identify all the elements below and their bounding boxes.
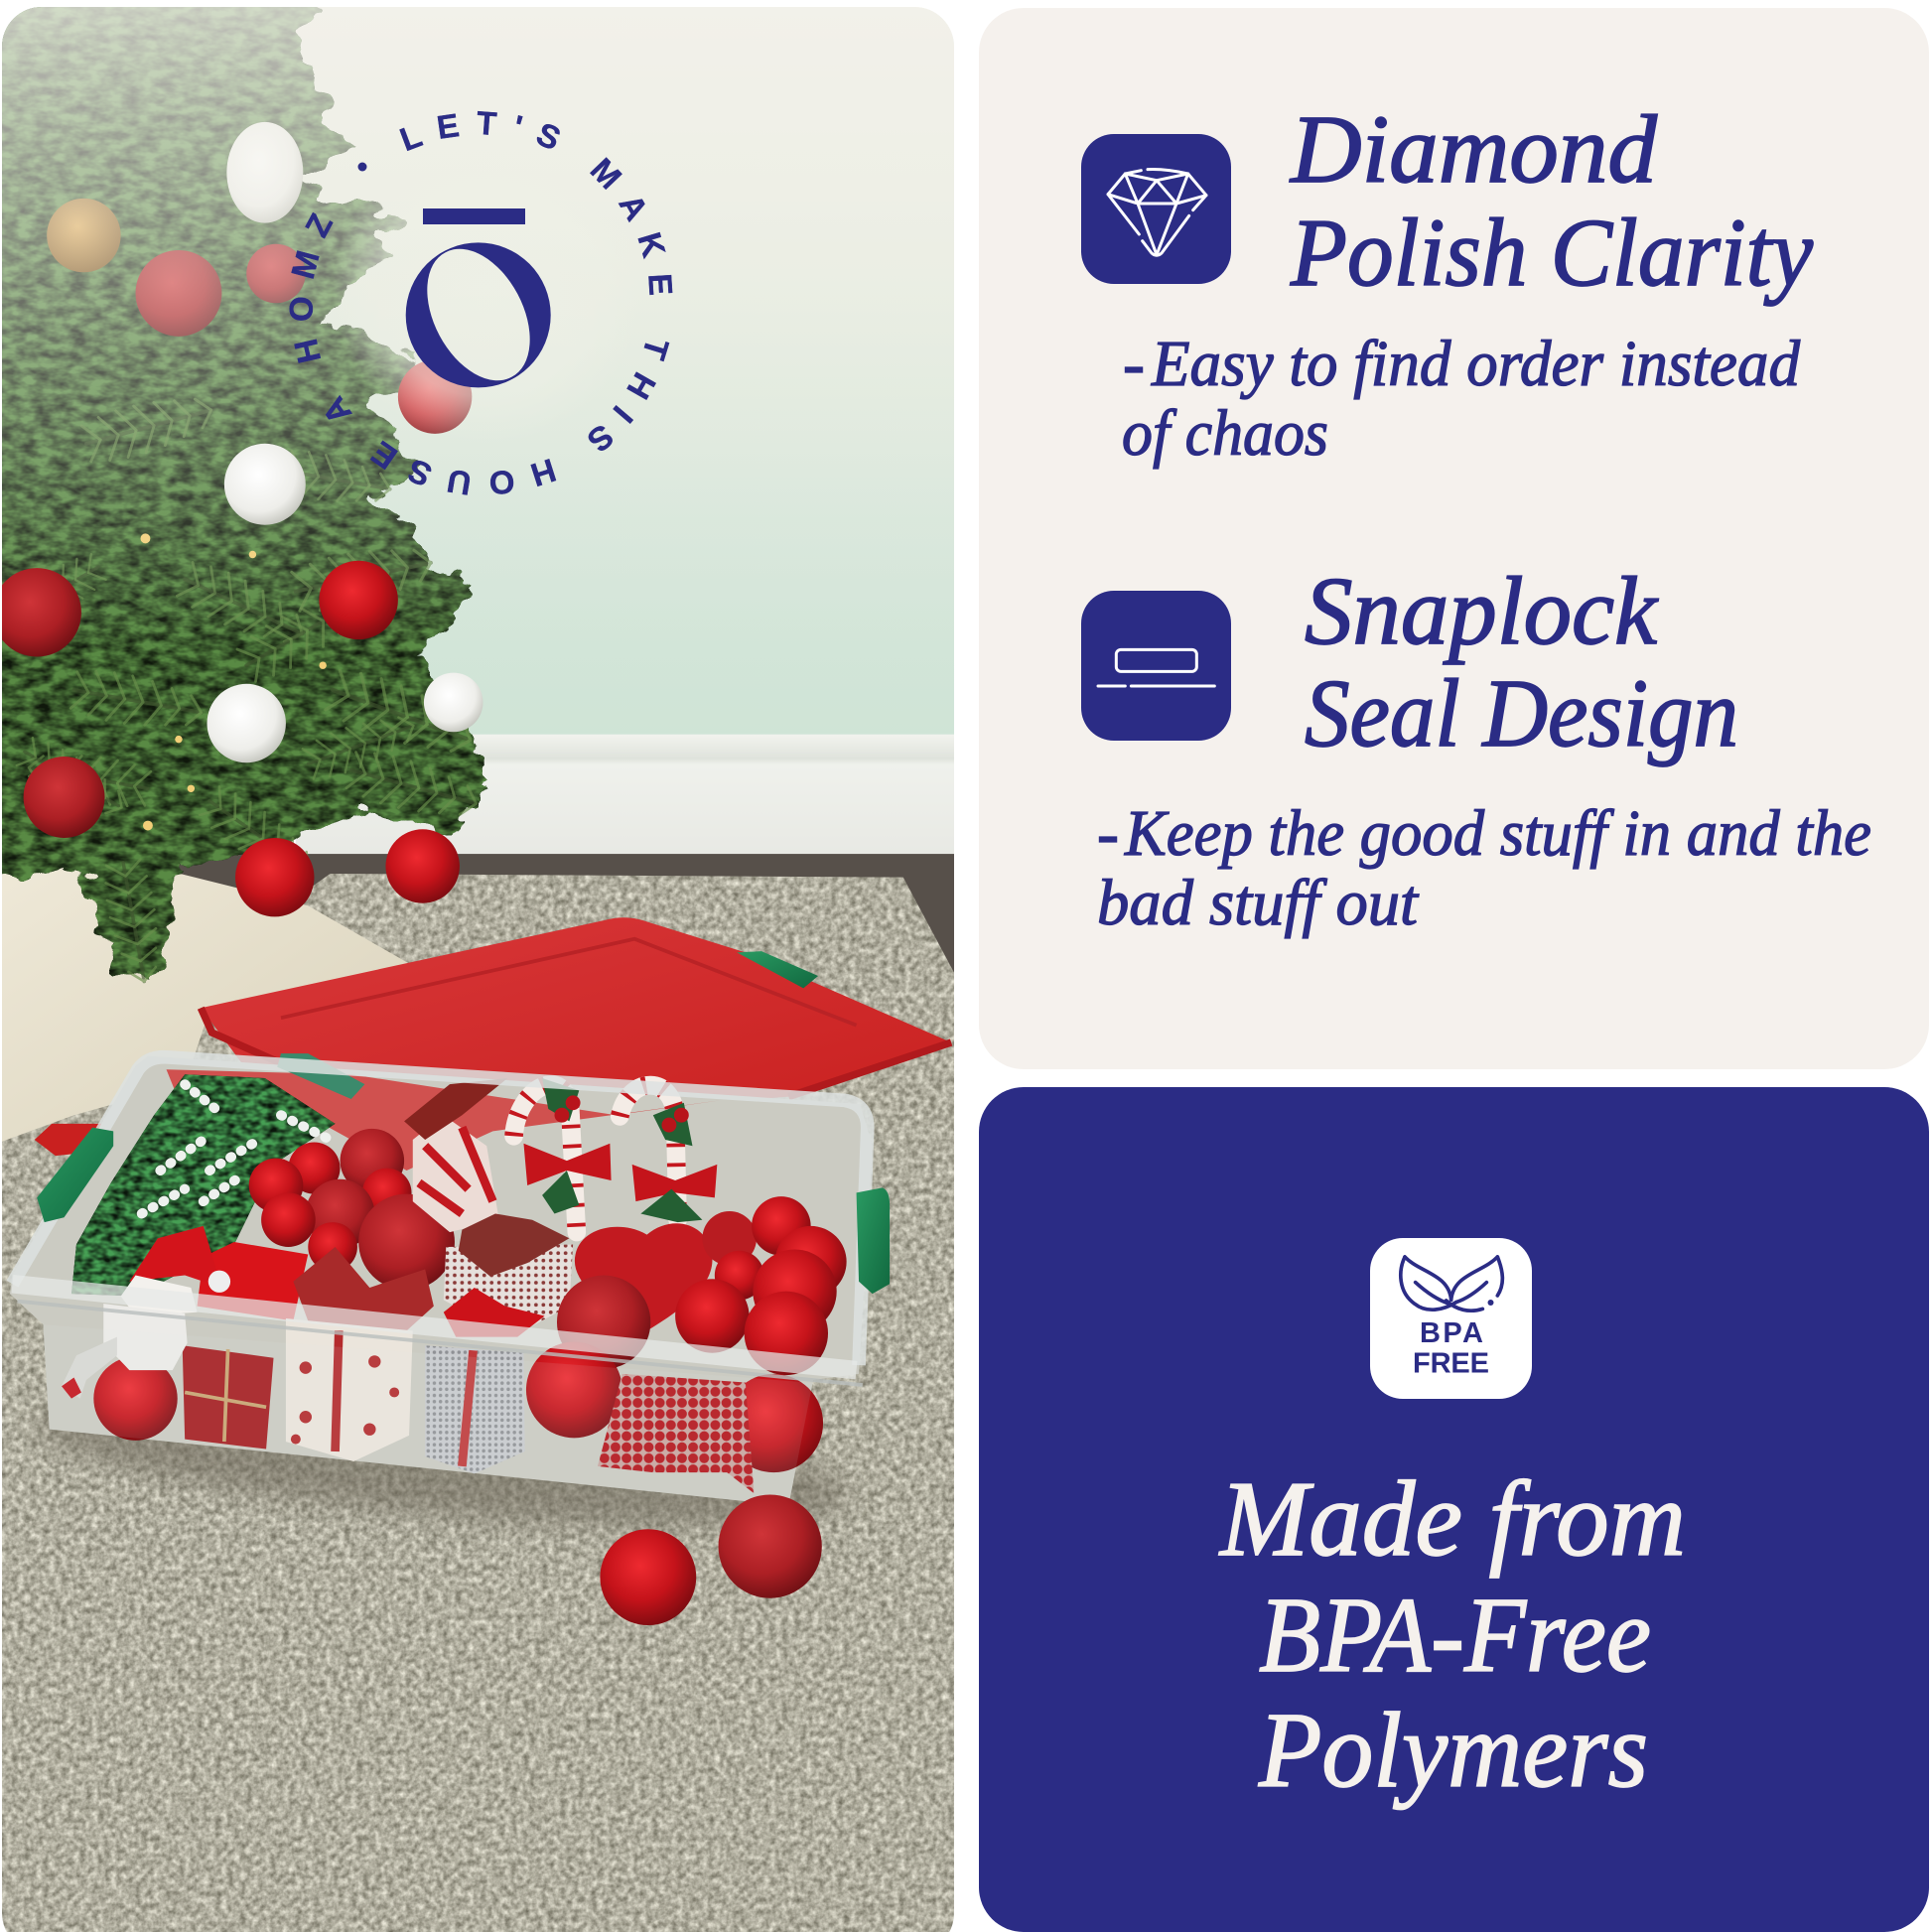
text: easy to find order: of chaos: [1122, 397, 1328, 470]
icon: diamond: [1081, 134, 1231, 284]
text: keep the good stuff: bad stuff out: [1097, 867, 1420, 939]
top haze overlay: [2, 7, 473, 621]
candy canes: [514, 1085, 678, 1232]
christmas tree: [0, 0, 490, 985]
santa figure: [62, 1304, 188, 1399]
text: easy to find order: Easy to find order instead: [1151, 328, 1801, 400]
glitter heart: [575, 1223, 712, 1333]
tree skirt: [0, 857, 409, 1142]
green clip seen through back wall: [277, 1053, 364, 1099]
text: keep the good stuff: -: [1097, 797, 1119, 870]
panel: product photo: [2, 7, 954, 1932]
heading: made from BPA-free polymers: BPA-Free: [1259, 1577, 1651, 1695]
clear storage box: [10, 1053, 890, 1506]
logo macron bar: [423, 208, 525, 224]
rug: [0, 863, 961, 1932]
green handle left: [37, 1128, 113, 1222]
cane bows: [523, 1078, 717, 1222]
logo dot: [357, 163, 367, 171]
icon: BPA free leaves: BPA: [1420, 1317, 1483, 1349]
logo ring text: LET'S MAKE THIS HOUSE A HOMZ: [289, 111, 673, 495]
ornaments on lower tree: [0, 444, 483, 916]
box interior: [10, 1056, 873, 1506]
heading: made from BPA-free polymers: Made from: [1218, 1460, 1686, 1579]
text: keep the good stuff: Keep the good stuff in and the: [1124, 797, 1871, 870]
heading: diamond polish clarity: [1289, 96, 1813, 307]
heading: made from BPA-free polymers: [1218, 1460, 1686, 1810]
baseboard: [296, 735, 961, 855]
red baubles right: [557, 1196, 847, 1375]
heading: diamond polish clarity: Polish Clarity: [1290, 200, 1813, 307]
lower box contents: [93, 1318, 823, 1493]
green handle right: [857, 1187, 890, 1294]
icon: BPA free leaves: [1370, 1238, 1532, 1399]
heading: diamond polish clarity: Diamond: [1289, 96, 1658, 204]
gift bow and red bow: [293, 1247, 545, 1337]
greenery: [71, 1074, 336, 1297]
heading: snaplock seal design: Snaplock: [1305, 558, 1658, 665]
heading: made from BPA-free polymers: Polymers: [1258, 1692, 1648, 1810]
circular brand logo: [289, 111, 673, 495]
loose matte ornament: [600, 1529, 696, 1625]
lid seen through back wall: [167, 1069, 721, 1171]
wall: [303, 44, 954, 735]
glitter gift upper: [444, 1213, 573, 1337]
red fabric behind box: [35, 1124, 104, 1156]
wood floor: [179, 854, 954, 973]
ornaments on tree: [47, 122, 472, 434]
box rims: [12, 1057, 868, 1385]
icon: BPA free leaves: FREE: [1413, 1348, 1489, 1380]
translucent front wall: [43, 1324, 859, 1506]
panel: features: [979, 8, 1929, 1069]
heading: snaplock seal design: [1305, 558, 1738, 767]
logo haze: [340, 201, 473, 433]
panel: BPA free: [979, 1087, 1929, 1932]
striped sack ornament: [404, 1078, 507, 1232]
heading: snaplock seal design: Seal Design: [1305, 660, 1738, 767]
logo O mark: [406, 242, 551, 387]
icon: snaplock seal: [1081, 591, 1231, 741]
santa hat and stocking: [121, 1226, 308, 1320]
text: easy to find order: -: [1123, 328, 1145, 400]
box shadow: [32, 1407, 854, 1539]
text: easy to find order: [1122, 328, 1801, 470]
text: keep the good stuff: [1097, 797, 1871, 939]
loose glitter ornament: [719, 1494, 822, 1598]
red baubles upper: [249, 1129, 455, 1290]
storage lid: [198, 917, 953, 1100]
